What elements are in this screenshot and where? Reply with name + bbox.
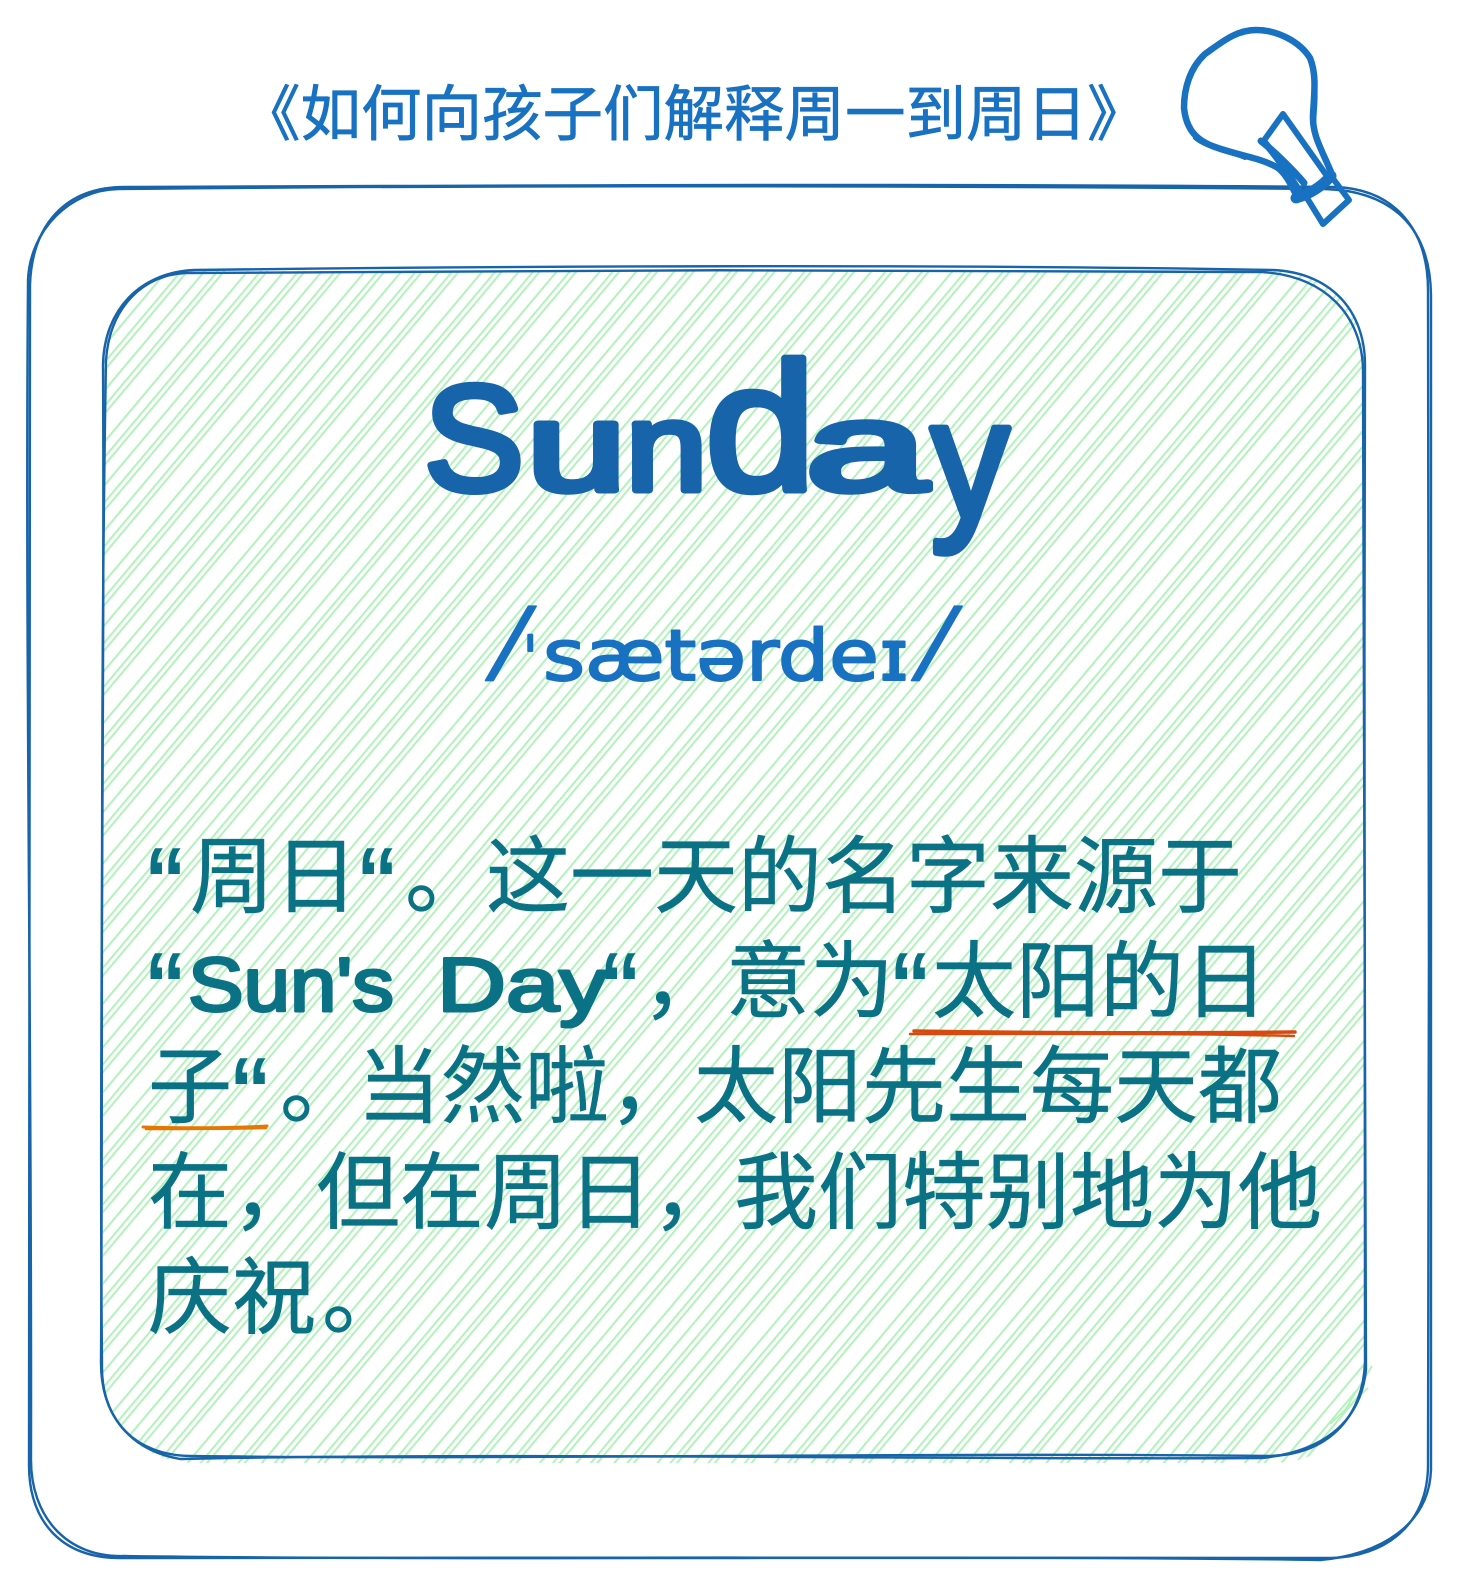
line 3: 子 bbox=[148, 1040, 232, 1134]
panel: hatched green card bbox=[103, 271, 1372, 1463]
underline: red bbox=[910, 1031, 1295, 1036]
line 1: 周日 bbox=[190, 830, 358, 924]
line 3: 。 bbox=[280, 1040, 364, 1134]
line 1: “ bbox=[359, 826, 396, 949]
line 3: 太阳先生每天都 bbox=[694, 1040, 1282, 1134]
line 5: 庆祝 bbox=[148, 1251, 316, 1345]
main word: Sunday: n bbox=[626, 378, 707, 517]
line 4: 在， bbox=[148, 1146, 316, 1240]
icon: light bulb bbox=[1184, 30, 1349, 224]
latin: Sun's: Sun's bbox=[188, 943, 394, 1028]
phonetic transcription: sætərdeɪ bbox=[543, 615, 909, 697]
line 2: “ bbox=[147, 931, 184, 1054]
line 1: 。 bbox=[405, 830, 489, 924]
phonetic transcription bbox=[482, 588, 967, 697]
main word: Sunday: u bbox=[527, 378, 626, 517]
line 1: 这一天的名字来源于 bbox=[486, 830, 1242, 924]
phonetic transcription: / bbox=[908, 588, 967, 694]
line 2: “ bbox=[892, 931, 929, 1054]
main word: Sunday: a bbox=[806, 378, 928, 517]
line 5: 。 bbox=[322, 1251, 406, 1345]
title: 《如何向孩子们解释周一到周日》 bbox=[240, 80, 1148, 148]
underline: orange bbox=[143, 1126, 267, 1129]
phonetic transcription: / bbox=[482, 588, 541, 694]
line 4: 但在周日， bbox=[316, 1146, 736, 1240]
line 3: 当然啦， bbox=[357, 1040, 693, 1134]
panel: inner sketch frame bbox=[101, 266, 1366, 1459]
phonetic transcription: ˈ bbox=[522, 625, 538, 695]
main word: Sunday: d bbox=[705, 325, 816, 529]
main word: Sunday: y bbox=[931, 365, 1009, 555]
line 2: 太阳的日 bbox=[932, 935, 1268, 1029]
line 2: 意为 bbox=[726, 935, 894, 1029]
main word: Sunday bbox=[424, 325, 1009, 555]
line 2: “ bbox=[602, 931, 639, 1054]
line 3: “ bbox=[232, 1036, 269, 1159]
latin: Day: Day bbox=[437, 943, 607, 1028]
line 1: “ bbox=[147, 826, 184, 949]
main word: Sunday: S bbox=[424, 354, 524, 522]
text block: explanation bbox=[147, 826, 1322, 1345]
line 4: 我们特别地为他 bbox=[734, 1146, 1322, 1240]
line 2: ， bbox=[642, 935, 726, 1029]
